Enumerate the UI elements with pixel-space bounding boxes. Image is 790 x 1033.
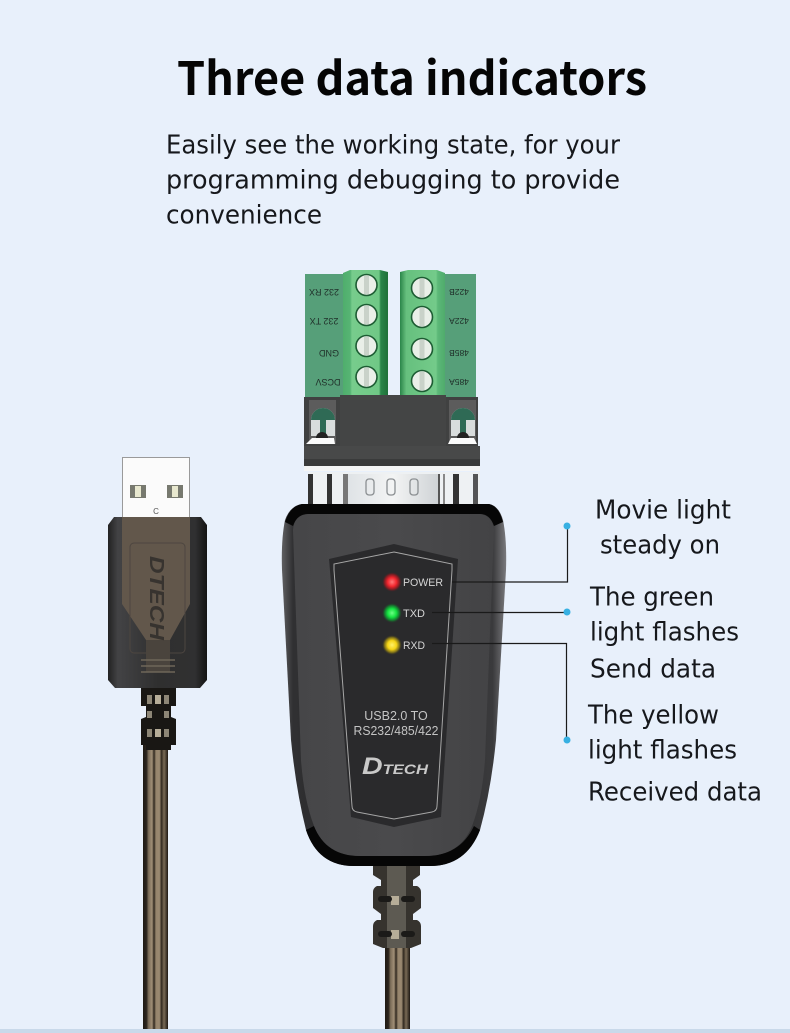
left label panel <box>305 274 345 398</box>
metal shell <box>308 472 480 506</box>
callout text: power: Movie light <box>595 496 731 526</box>
callout text: power: steady on <box>600 530 720 560</box>
callout text: RXD <box>587 700 762 808</box>
callout text: TXD: Send data <box>590 654 716 684</box>
callout line: power <box>452 522 570 582</box>
DTECH logo: DTECH <box>362 753 429 780</box>
LED labels: TXD <box>403 608 425 620</box>
adapter body <box>282 504 506 866</box>
USB metal connector: C <box>153 507 159 516</box>
callout text: TXD: light flashes <box>590 618 739 648</box>
left label panel: 232 RX <box>309 287 339 297</box>
DB9 connector housing <box>304 395 480 506</box>
left screw <box>306 400 336 444</box>
intro text: convenience <box>166 200 322 230</box>
callout text: RXD: The yellow <box>587 700 719 730</box>
title: Three data indicators <box>177 43 647 109</box>
adapter strain relief <box>373 866 421 948</box>
outer shell <box>282 504 506 866</box>
left label panel: 232 TX <box>310 316 338 326</box>
USB strain relief <box>141 687 176 750</box>
USB cable <box>143 745 168 1029</box>
USB boot <box>108 517 207 688</box>
LED: TXD <box>382 603 402 623</box>
bottom strip <box>0 1029 790 1033</box>
top face <box>293 514 494 856</box>
model text: RS232/485/422 <box>354 724 439 738</box>
right label panel: 422A <box>449 316 469 326</box>
left label panel: DCSV <box>315 377 341 387</box>
model text: USB2.0 TO <box>364 709 428 723</box>
LED labels: POWER <box>403 577 443 589</box>
USB metal connector <box>122 458 190 520</box>
USB boot: DTECH <box>145 556 167 641</box>
terminal block <box>305 270 476 398</box>
right screw <box>448 400 477 444</box>
display panel <box>329 544 458 827</box>
LED: RXD <box>382 635 402 655</box>
USB plug <box>108 458 207 750</box>
callout text: TXD <box>589 582 739 684</box>
callout line: TXD <box>432 608 570 616</box>
callout text: TXD: The green <box>589 582 714 612</box>
LED labels <box>403 577 443 652</box>
right label panel: 485A <box>449 377 469 387</box>
right green terminal <box>400 270 445 395</box>
model text <box>354 709 439 738</box>
callout text: RXD: Received data <box>588 778 762 808</box>
right label panel: 422B <box>449 287 469 297</box>
intro text <box>166 130 620 230</box>
callout line: RXD <box>432 644 570 744</box>
intro text: programming debugging to provide <box>166 166 620 196</box>
intro text: Easily see the working state, for your <box>166 130 620 160</box>
callout text: power <box>595 496 731 560</box>
left green terminal <box>343 270 388 395</box>
LED: power <box>382 572 402 592</box>
callout text: RXD: light flashes <box>588 736 737 766</box>
right label panel: 485B <box>449 348 469 358</box>
adapter cable <box>385 945 410 1029</box>
left label panel: GND <box>318 348 339 358</box>
LED labels: RXD <box>403 640 425 652</box>
right label panel <box>444 274 476 398</box>
